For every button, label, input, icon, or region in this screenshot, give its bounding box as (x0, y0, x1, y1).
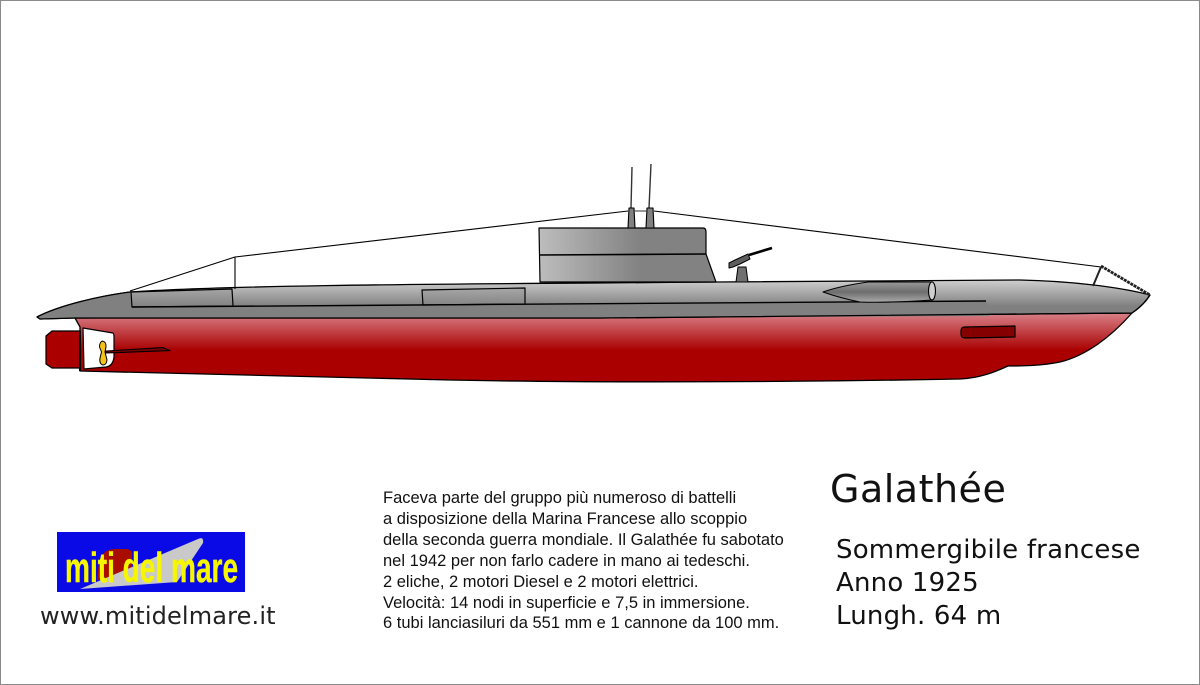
description text: a disposizione della Marina Francese allo scoppio (383, 510, 747, 528)
periscopes (628, 164, 654, 228)
specifications: Anno 1925 (836, 568, 979, 598)
conning tower (539, 228, 716, 282)
stern cut-out with propeller (80, 328, 170, 371)
torpedo tube (823, 282, 936, 302)
bow net cutter (1093, 266, 1150, 295)
title: Galathée (830, 467, 1006, 511)
description text (383, 489, 784, 632)
grey upper hull (37, 280, 1150, 319)
specifications (836, 535, 1141, 631)
lower grey band of deck (37, 292, 990, 319)
description text: della seconda guerra mondiale. Il Galathée fu sabotato (383, 531, 784, 549)
deck gun (729, 248, 772, 282)
description text: 6 tubi lanciasiluri da 551 mm e 1 cannone da 100 mm. (383, 614, 779, 632)
specifications: Sommergibile francese (836, 535, 1141, 565)
propeller shaft (106, 348, 170, 353)
rigging wires (130, 211, 1101, 291)
specifications: Lungh. 64 m (836, 601, 1001, 631)
website address: www.mitidelmare.it (40, 602, 276, 630)
deck panels and deck line (131, 288, 986, 307)
rudder (46, 331, 82, 368)
red bow plate (961, 326, 1015, 338)
description text: Velocità: 14 nodi in superficie e 7,5 in immersione. (383, 594, 750, 612)
red lower hull (75, 313, 1132, 382)
description text: 2 eliche, 2 motori Diesel e 2 motori elettrici. (383, 573, 698, 591)
logo: miti del mare (57, 532, 245, 592)
description text: nel 1942 per non farlo cadere in mano ai tedeschi. (383, 552, 750, 570)
description text: Faceva parte del gruppo più numeroso di battelli (383, 489, 736, 507)
logo wordmark: miti del mare (65, 544, 238, 590)
propeller (100, 341, 107, 365)
